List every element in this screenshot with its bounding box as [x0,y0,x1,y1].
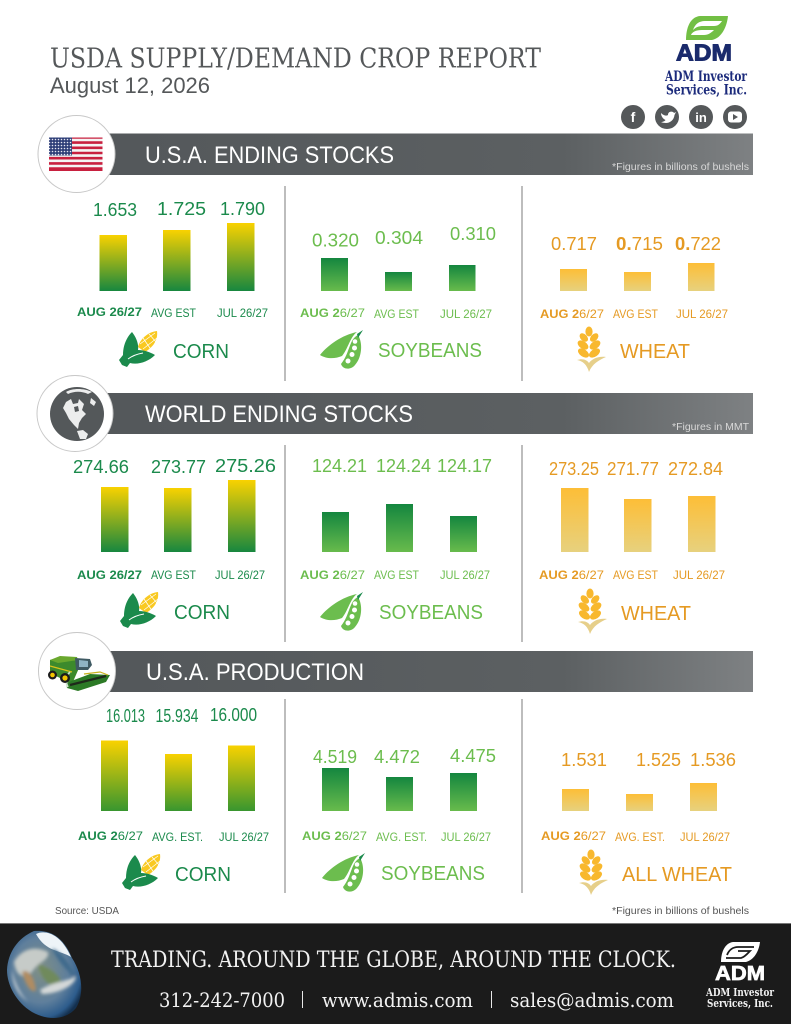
panel: U.S.A. corn: AUG 26/27 [77,305,142,319]
panel: U.S.A. soybeans: 0.304 [375,227,423,248]
panel: U.S.A. wheat: 0.722 [675,233,721,254]
contact line: www.admis.com [322,988,473,1012]
title: USDA SUPPLY/DEMAND CROP REPORT [50,44,541,74]
contact line: 312-242-7000 [159,988,285,1012]
social icons [621,105,747,129]
social icons: f [631,109,636,125]
panel: production wheat: 1.536 [690,749,736,770]
panel: U.S.A. soybeans: JUL 26/27 [440,307,492,321]
panel: U.S.A. wheat [540,233,728,372]
panel: production wheat: 1.525 [636,749,681,770]
panel: U.S.A. corn: CORN [173,341,229,363]
section band: U.S.A. ending stocks: *Figures in billions of bushels [612,161,749,173]
panel: world corn: AUG 26/27 [77,568,142,582]
report date: August 12, 2026 [50,73,210,98]
panel: U.S.A. soybeans: SOYBEANS [378,340,482,362]
panel: production corn: 16.013 [106,705,145,726]
panel: U.S.A. corn: 1.653 [93,199,137,220]
panel: U.S.A. wheat: AVG EST [613,307,659,321]
panel: world wheat: 272.84 [668,458,723,479]
section band: U.S.A. production [73,651,753,692]
panel: production wheat: AUG 2 6/27 [541,829,606,843]
panel: world corn: AVG EST [151,568,197,582]
panel: world soybeans [300,455,492,631]
panel: world corn: 273.77 [151,456,206,477]
panel: world corn: 275.26 [215,455,276,476]
panel: production wheat: JUL 26/27 [680,830,730,844]
panel: world corn: CORN [174,602,230,624]
ADM logo, white: ADM Investor [705,986,774,999]
panel: world corn [73,455,276,628]
panel: U.S.A. soybeans: AVG EST [374,307,420,321]
panel: production corn: 16.000 [210,704,257,725]
section band: U.S.A. ending stocks [73,134,753,175]
panel: production soybeans: 4.519 [313,746,357,767]
social icons: in [695,110,707,125]
section band: U.S.A. ending stocks: U.S.A. ENDING STOCKS [145,142,394,169]
ADM logo, white: ADM [715,963,765,985]
panel: production wheat: ALL WHEAT [622,864,732,886]
panel: production soybeans: JUL 26/27 [441,830,491,844]
panel: production soybeans: 4.475 [450,745,496,766]
panel: production wheat: AVG. EST. [615,830,665,844]
panel: U.S.A. wheat: 0.715 [616,233,663,254]
panel: U.S.A. wheat: WHEAT [620,341,690,363]
ADM logo: ADM [676,40,732,66]
section band: U.S.A. production: U.S.A. PRODUCTION [146,659,364,686]
panel: production wheat: 1.531 [561,749,607,770]
panel: U.S.A. soybeans: 0.320 [312,230,359,250]
panel: world soybeans: AVG EST [374,568,420,582]
panel: world wheat: AUG 2 6/27 [539,568,604,582]
panel: production soybeans: AUG 2 6/27 [302,829,367,843]
panel: U.S.A. corn: JUL 26/27 [217,306,268,320]
panel: U.S.A. corn: 1.790 [220,198,265,219]
contact line: sales@admis.com [510,988,674,1012]
footer banner [0,923,791,1024]
panel: production soybeans: AVG. EST. [376,830,427,844]
panel: world wheat [539,458,725,634]
panel: world wheat: AVG EST [613,568,659,582]
panel: U.S.A. corn: 1.725 [157,198,206,219]
ADM logo: Services, Inc. [666,82,747,98]
panel: production corn [78,704,269,890]
panel: world soybeans: 124.24 [376,455,431,476]
source note: Source: USDA [55,905,119,917]
panel: world soybeans: AUG 2 6/27 [300,568,365,582]
panel: world wheat: 271.77 [607,458,659,479]
ADM logo: ADM Investor [664,69,747,85]
units note: *Figures in billions of bushels [612,905,749,917]
panel: U.S.A. wheat: 0.717 [551,233,597,254]
panel: production corn: CORN [175,864,231,886]
panel: production corn: 15.934 [156,705,198,726]
section band: world ending stocks: WORLD ENDING STOCKS [145,401,413,428]
panel: U.S.A. wheat: JUL 26/27 [676,307,728,321]
ADM logo, white: Services, Inc. [707,997,773,1010]
section band: world ending stocks: *Figures in MMT [672,421,750,433]
panel: U.S.A. wheat: AUG 26/27 [540,307,604,321]
panel: production soybeans [302,745,496,892]
panel: world soybeans: 124.21 [312,455,367,476]
panel: world wheat: WHEAT [621,603,691,625]
icon: earth [7,931,81,1018]
panel: world wheat: JUL 26/27 [673,568,725,582]
panel: U.S.A. soybeans: AUG 2 6/27 [300,306,365,320]
panel: world corn: 274.66 [73,456,129,477]
ADM logo [664,16,747,98]
icon: combine harvester badge [38,632,116,710]
panel: production corn: AVG. EST. [152,830,203,844]
icon: globe badge [37,376,113,452]
panel: production wheat [541,749,736,895]
panel: U.S.A. soybeans: 0.310 [450,223,496,244]
panel: production corn: AUG 2 6/27 [78,829,143,843]
section band: world ending stocks [73,393,753,434]
panel: U.S.A. soybeans [300,223,496,369]
panel: world wheat: 273.25 [549,458,599,479]
footer banner: TRADING. AROUND THE GLOBE, AROUND THE CLOCK. [111,948,676,973]
panel: world soybeans: 124.17 [437,455,492,476]
panel: U.S.A. corn: AVG EST [151,306,197,320]
panel: world soybeans: SOYBEANS [379,602,483,624]
panel: U.S.A. corn [77,198,268,367]
panel: production soybeans: SOYBEANS [381,863,485,885]
icon: U.S. flag badge [38,116,115,192]
panel: world soybeans: JUL 26/27 [440,568,490,582]
panel: production soybeans: 4.472 [374,746,420,767]
panel: production corn: JUL 26/27 [219,830,269,844]
contact line [159,988,674,1012]
ADM logo, white [705,942,774,1010]
panel: world corn: JUL 26/27 [215,568,265,582]
